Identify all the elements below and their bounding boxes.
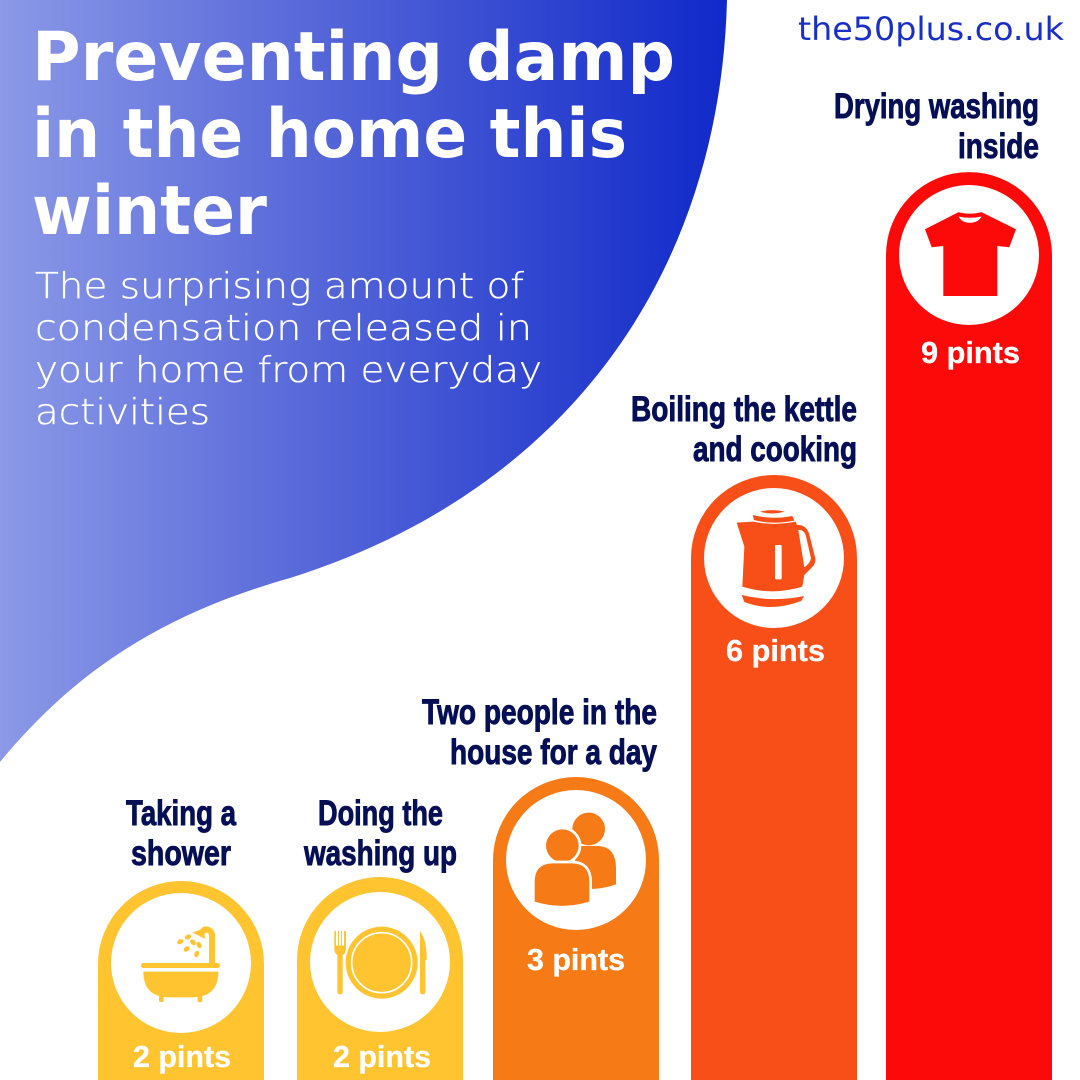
icon: two people: [506, 790, 646, 930]
subtitle: The surprising amount of: [35, 266, 524, 307]
value: 9 pints: 9 pints: [921, 335, 1020, 370]
label: taking a shower: [126, 794, 236, 873]
label: drying washing: [834, 87, 1039, 166]
label: doing the washing up: washing up: [303, 834, 457, 873]
value: 2 pints washing up: 2 pints: [333, 1039, 431, 1074]
value: 2 pints shower: 2 pints: [133, 1039, 231, 1074]
label: doing the washing up: Doing the: [318, 794, 443, 833]
label: boiling the kettle: Boiling the kettle: [631, 390, 857, 429]
label: taking a shower: shower: [131, 834, 231, 873]
icon: bath and shower: [111, 893, 251, 1033]
column: drying washing inside, 9 pints: [834, 87, 1052, 1080]
value: 6 pints: 6 pints: [726, 633, 825, 668]
value: 3 pints: 3 pints: [527, 942, 625, 977]
subtitle: condensation released in: [35, 308, 532, 349]
bar: 9 pints: [886, 172, 1052, 1080]
icon: plate and cutlery: [310, 892, 450, 1032]
title: winter: [32, 172, 267, 251]
label: two people: [422, 693, 657, 772]
label: boiling the kettle: [631, 390, 857, 469]
column: boiling the kettle and cooking, 6 pints: [631, 390, 857, 1080]
website address: the50plus.co.uk: [798, 10, 1064, 48]
label: two people: house for a day: [450, 733, 657, 772]
label: two people: Two people in the: [422, 693, 657, 732]
column: doing the washing up, 2 pints: [297, 794, 463, 1080]
label: doing the washing up: [303, 794, 457, 873]
column: two people in the house for a day, 3 pints: [422, 693, 659, 1080]
title: [32, 18, 675, 251]
title: in the home this: [32, 95, 627, 174]
icon: kettle: [704, 488, 844, 628]
bar: 3 pints: [493, 777, 659, 1080]
subtitle: activities: [35, 392, 210, 433]
background blue wave panel: [0, 0, 727, 762]
label: drying washing: inside: [958, 127, 1039, 166]
bar: 2 pints washing up: [297, 877, 463, 1080]
column: taking a shower, 2 pints: [98, 794, 264, 1080]
title: Preventing damp: [32, 18, 675, 97]
bar: 6 pints: [691, 475, 857, 1080]
bar: 2 pints shower: [98, 881, 264, 1080]
icon: t-shirt: [899, 185, 1039, 325]
subtitle: [35, 266, 542, 433]
label: boiling the kettle: and cooking: [693, 430, 857, 469]
subtitle: your home from everyday: [35, 350, 542, 391]
label: taking a shower: Taking a: [126, 794, 236, 833]
